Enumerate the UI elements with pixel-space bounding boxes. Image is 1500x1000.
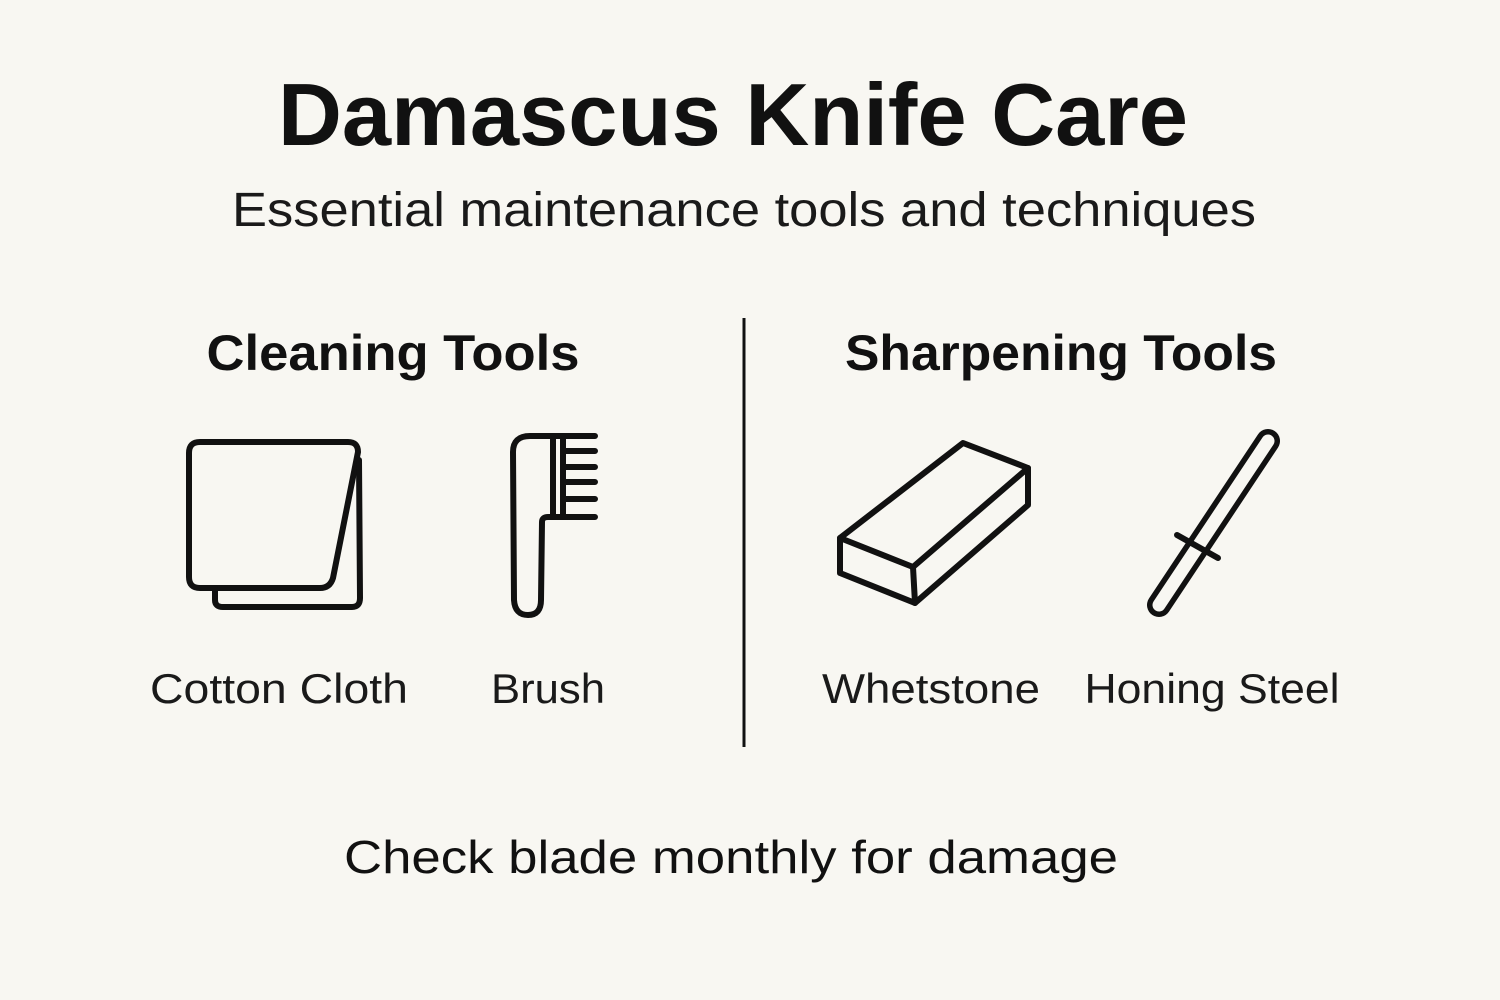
label: honing steel: Honing Steel [1084, 665, 1340, 712]
icon: cotton cloth [189, 442, 360, 607]
heading: cleaning tools: Cleaning Tools [206, 325, 580, 381]
heading: sharpening tools: Sharpening Tools [845, 325, 1277, 381]
icon: honing steel [1159, 441, 1268, 605]
title: Damascus Knife Care [278, 65, 1188, 164]
panel: cleaning tools [150, 325, 605, 712]
label: brush: Brush [491, 665, 605, 712]
footer note: Check blade monthly for damage [344, 831, 1118, 883]
icon: whetstone [840, 443, 1028, 603]
label: cotton cloth: Cotton Cloth [150, 665, 408, 712]
label: whetstone: Whetstone [822, 665, 1040, 712]
subtitle: Essential maintenance tools and techniques [232, 184, 1256, 237]
panel: sharpening tools [822, 325, 1340, 712]
icon: brush [513, 436, 595, 615]
